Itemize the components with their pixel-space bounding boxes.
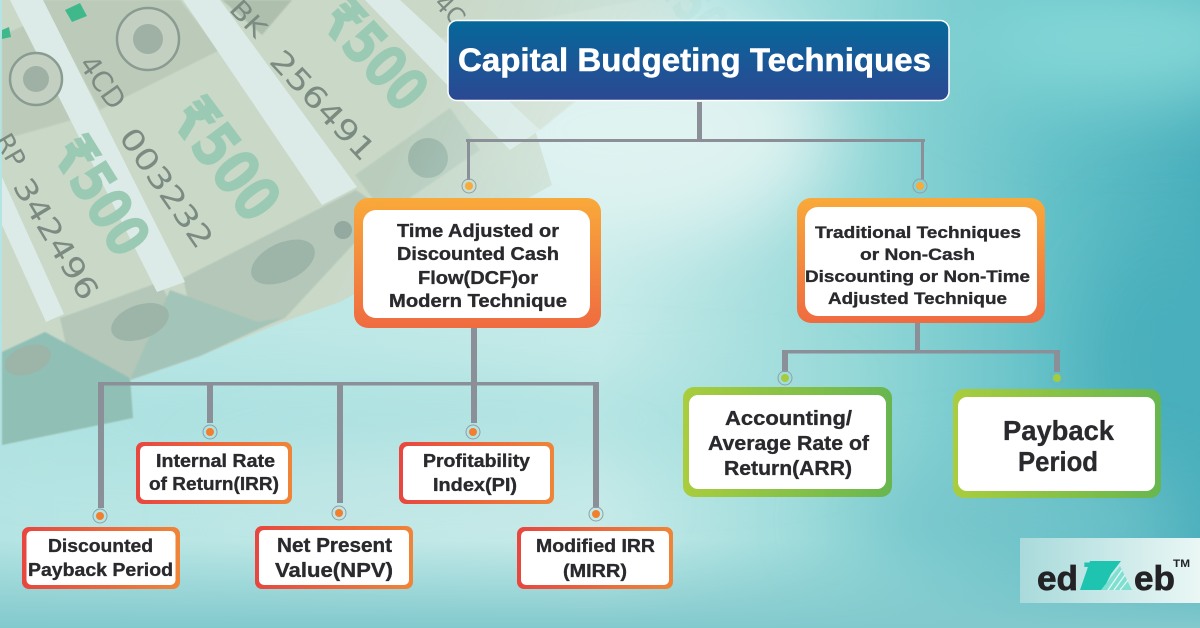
node: discounted payback bbox=[93, 509, 107, 523]
rupee values bbox=[38, 0, 756, 268]
panel: time adjusted / DCF techniques: Discounted Cash bbox=[397, 244, 559, 264]
box: payback period: Payback bbox=[1003, 415, 1114, 446]
box: internal rate of return: of Return(IRR) bbox=[149, 473, 279, 494]
rupee values: ₹500 bbox=[156, 83, 296, 235]
panel: time adjusted / DCF techniques: Modern Technique bbox=[389, 291, 567, 311]
box: net present value: Net Present bbox=[277, 534, 392, 557]
panel: traditional techniques: Discounting or Non-Time bbox=[805, 267, 1030, 286]
box: accounting / average rate of return: Accounting/ bbox=[725, 407, 852, 430]
logo: edZeb bbox=[1020, 538, 1200, 603]
box: accounting / average rate of return bbox=[683, 387, 892, 497]
box: modified IRR: Modified IRR bbox=[536, 535, 655, 556]
node: NPV bbox=[332, 506, 346, 520]
box: profitability index: Index(PI) bbox=[433, 474, 517, 495]
serial numbers: 256491 bbox=[262, 44, 382, 168]
box: accounting / average rate of return: Return(ARR) bbox=[724, 457, 852, 480]
panel: time adjusted / DCF techniques: Flow(DCF)or bbox=[418, 268, 538, 288]
box: modified IRR: (MIRR) bbox=[563, 560, 627, 581]
emblems bbox=[1, 138, 448, 381]
logo: edZeb: TM bbox=[1173, 558, 1190, 570]
panel: traditional techniques: Adjusted Technique bbox=[828, 289, 1007, 308]
panel: time adjusted / DCF techniques: Time Adjusted or bbox=[397, 221, 559, 241]
serial numbers: 342496 bbox=[5, 172, 105, 307]
node: MIRR bbox=[589, 507, 603, 521]
node: IRR bbox=[203, 425, 217, 439]
white security strips bbox=[2, 0, 540, 322]
box: internal rate of return bbox=[136, 442, 292, 504]
box: internal rate of return: Internal Rate bbox=[156, 450, 275, 471]
bank seals bbox=[10, 8, 352, 239]
box: modified IRR bbox=[517, 527, 673, 589]
box: discounted payback period bbox=[22, 527, 180, 589]
box: net present value bbox=[255, 526, 413, 589]
title box bbox=[448, 20, 949, 100]
box: profitability index: Profitability bbox=[423, 450, 531, 471]
panel: time adjusted / DCF techniques bbox=[354, 198, 601, 328]
node: payback bbox=[1050, 371, 1064, 385]
panel: traditional techniques: or Non-Cash bbox=[860, 245, 975, 264]
banknotes photo backdrop bbox=[0, 0, 756, 445]
connector: title to branches bbox=[466, 102, 925, 180]
node: right branch bbox=[913, 179, 927, 193]
box: accounting / average rate of return: Average Rate of bbox=[708, 432, 869, 455]
box: payback period: Period bbox=[1018, 446, 1098, 477]
box: discounted payback period: Discounted bbox=[48, 535, 153, 556]
serial numbers: 4CD bbox=[72, 49, 133, 116]
serial numbers: 003232 bbox=[111, 122, 220, 255]
logo: edZeb: ed bbox=[1037, 560, 1078, 598]
box: profitability index bbox=[399, 442, 554, 504]
box: net present value: Value(NPV) bbox=[275, 559, 393, 582]
green foil marks bbox=[2, 3, 87, 39]
panel: traditional techniques bbox=[797, 198, 1045, 323]
title box: Capital Budgeting Techniques bbox=[458, 42, 931, 78]
note security bands bbox=[2, 0, 575, 446]
node: PI bbox=[466, 425, 480, 439]
rupee values: ₹500 bbox=[38, 123, 164, 268]
panel: traditional techniques: Traditional Techniques bbox=[815, 223, 1021, 242]
connector: DCF techniques tree bbox=[98, 328, 599, 508]
connector: traditional techniques tree bbox=[782, 323, 1060, 372]
note body bbox=[2, 0, 700, 445]
box: discounted payback period: Payback Period bbox=[28, 559, 173, 580]
serial numbers bbox=[0, 0, 471, 307]
node: ARR bbox=[778, 371, 792, 385]
logo: edZeb: eb bbox=[1134, 560, 1175, 598]
node: left branch bbox=[462, 179, 476, 193]
box: payback period bbox=[953, 389, 1161, 498]
logo: edZeb: Z bbox=[1080, 555, 1120, 599]
